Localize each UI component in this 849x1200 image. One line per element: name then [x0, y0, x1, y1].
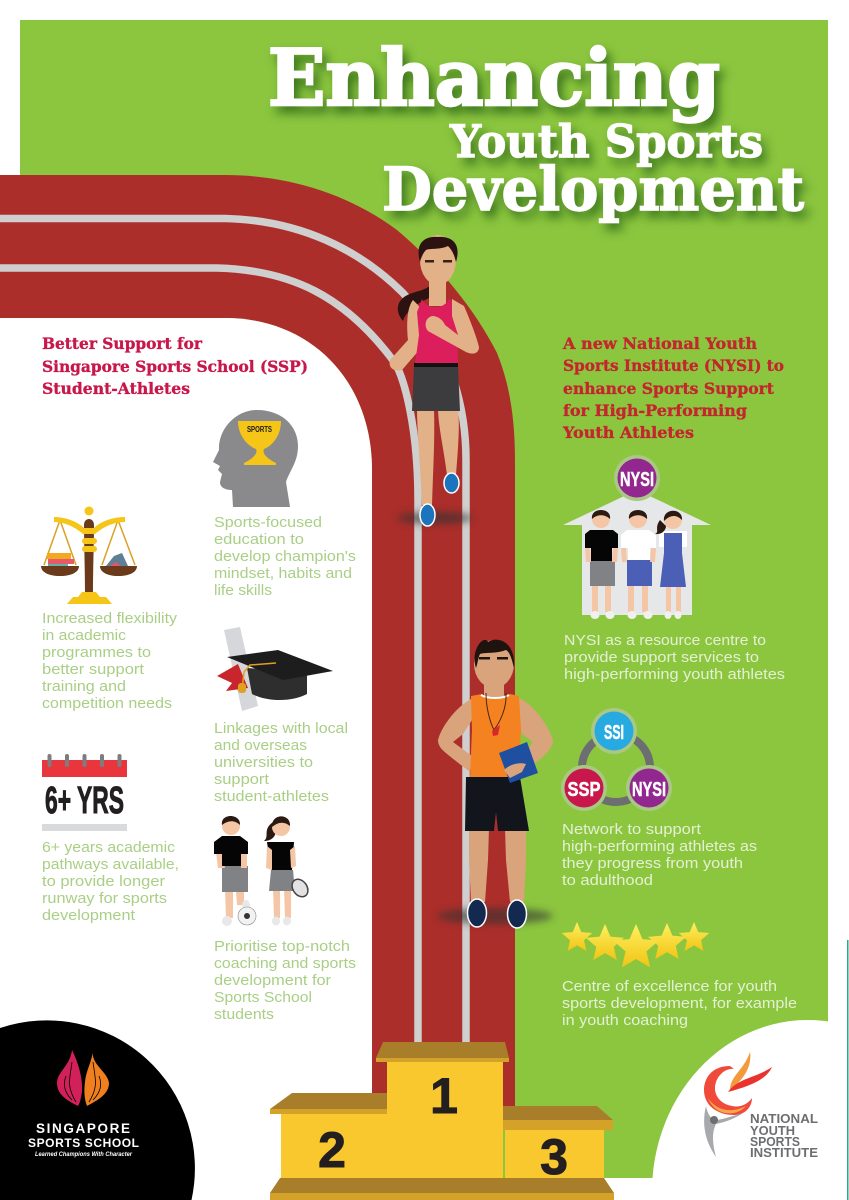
- title: [268, 33, 804, 225]
- text: linkages: and overseas: [214, 738, 307, 754]
- text: centre of excellence: sports development, for example: [562, 996, 797, 1012]
- text: network: they progress from youth: [562, 856, 743, 872]
- logo: Singapore Sports School: SPORTS SCHOOL: [28, 1136, 139, 1150]
- text: linkages: universities to: [214, 755, 313, 771]
- text: flexibility: better support: [42, 662, 144, 678]
- text: network: Network to support: [562, 822, 701, 838]
- heading: SSP: Student-Athletes: [42, 379, 190, 398]
- icon: student athletes: [214, 816, 311, 926]
- text: coaching: development for: [214, 973, 331, 989]
- podium: 3: [540, 1129, 568, 1185]
- title: Enhancing: [268, 33, 720, 124]
- text: coaching: [214, 939, 356, 1023]
- podium: 1: [430, 1068, 458, 1124]
- text: sports-focused education: [214, 515, 356, 599]
- heading: NYSI: A new National Youth: [562, 334, 757, 353]
- icon: network of SSI SSP NYSI: SSP: [568, 779, 600, 801]
- text: linkages: [214, 721, 348, 805]
- text: 6+ years: runway for sports: [42, 891, 167, 907]
- heading: SSP: [42, 334, 308, 398]
- text: sports-focused education: education to: [214, 532, 304, 548]
- heading: NYSI: Youth Athletes: [562, 423, 694, 442]
- text: 6+ years: [42, 840, 179, 924]
- text: NYSI resource centre: NYSI as a resource centre to: [564, 633, 766, 649]
- heading: NYSI: for High-Performing: [563, 401, 747, 420]
- icon: network of SSI SSP NYSI: NYSI: [632, 779, 666, 801]
- text: NYSI resource centre: high-performing youth athletes: [564, 667, 785, 683]
- text: network: high-performing athletes as: [562, 839, 757, 855]
- title: Youth Sports: [449, 115, 763, 168]
- text: flexibility: in academic: [42, 628, 126, 644]
- podium: 2: [318, 1122, 346, 1178]
- icon: network of SSI SSP NYSI: [561, 708, 672, 811]
- text: centre of excellence: in youth coaching: [562, 1013, 688, 1029]
- text: sports-focused education: mindset, habits and: [214, 566, 352, 582]
- logo: Singapore Sports School: [0, 1020, 195, 1200]
- icon: calendar 6+ YRS: [42, 754, 127, 831]
- text: 6+ years: 6+ years academic: [42, 840, 175, 856]
- text: flexibility: training and: [42, 679, 126, 695]
- logo: Singapore Sports School: SINGAPORE: [36, 1121, 130, 1136]
- heading: NYSI: [562, 334, 784, 442]
- heading: NYSI: Sports Institute (NYSI) to: [563, 356, 784, 375]
- text: sports-focused education: Sports-focused: [214, 515, 322, 531]
- text: coaching: Prioritise top-notch: [214, 939, 350, 955]
- text: network: to adulthood: [562, 873, 653, 889]
- text: linkages: Linkages with local: [214, 721, 348, 737]
- logo: National Youth Sports Institute: NATIONAL: [750, 1112, 818, 1126]
- text: NYSI resource centre: [564, 633, 785, 683]
- running track: [0, 175, 515, 1110]
- icon: balance scale: [41, 506, 137, 604]
- text: network: [562, 822, 757, 889]
- icon: NYSI house with students: [563, 455, 711, 619]
- text: 6+ years: pathways available,: [42, 857, 179, 873]
- heading: SSP: Better Support for: [42, 334, 203, 353]
- text: sports-focused education: develop champion's: [214, 549, 356, 565]
- text: sports-focused education: life skills: [214, 583, 272, 599]
- icon: NYSI house with students: NYSI: [620, 469, 654, 491]
- text: flexibility: [42, 611, 178, 712]
- text: flexibility: competition needs: [42, 696, 172, 712]
- icon: calendar 6+ YRS: 6+ YRS: [45, 780, 124, 822]
- text: 6+ years: development: [42, 908, 135, 924]
- podium: [270, 1042, 614, 1200]
- icon: five stars: [562, 922, 709, 967]
- text: centre of excellence: Centre of excellence for youth: [562, 979, 777, 995]
- text: 6+ years: to provide longer: [42, 874, 165, 890]
- text: coaching: Sports School: [214, 990, 312, 1006]
- text: flexibility: Increased flexibility: [42, 611, 178, 627]
- text: linkages: support: [214, 772, 269, 788]
- title: Development: [382, 155, 804, 225]
- text: coaching: students: [214, 1007, 274, 1023]
- logo: National Youth Sports Institute: INSTITUTE: [750, 1146, 818, 1160]
- logo: Singapore Sports School: Learned Champions With Character: [35, 1152, 133, 1158]
- coach: [437, 640, 553, 928]
- icon: graduation cap: [217, 627, 333, 711]
- panel: white left panel: [0, 318, 372, 1200]
- text: coaching: coaching and sports: [214, 956, 356, 972]
- text: centre of excellence: [562, 979, 797, 1029]
- decorative edge line: [847, 940, 848, 1200]
- text: NYSI resource centre: provide support services to: [564, 650, 759, 666]
- text: linkages: student-athletes: [214, 789, 329, 805]
- runner: [390, 235, 479, 526]
- logo: National Youth Sports Institute: YOUTH: [750, 1124, 795, 1138]
- icon: head with trophy: [213, 410, 298, 507]
- heading: SSP: Singapore Sports School (SSP): [42, 357, 308, 376]
- icon: network of SSI SSP NYSI: SSI: [604, 722, 624, 744]
- logo: National Youth Sports Institute: [652, 1020, 849, 1200]
- icon: head with trophy: SPORTS: [247, 425, 272, 434]
- text: flexibility: programmes to: [42, 645, 151, 661]
- heading: NYSI: enhance Sports Support: [563, 379, 775, 398]
- logo: National Youth Sports Institute: SPORTS: [750, 1135, 800, 1149]
